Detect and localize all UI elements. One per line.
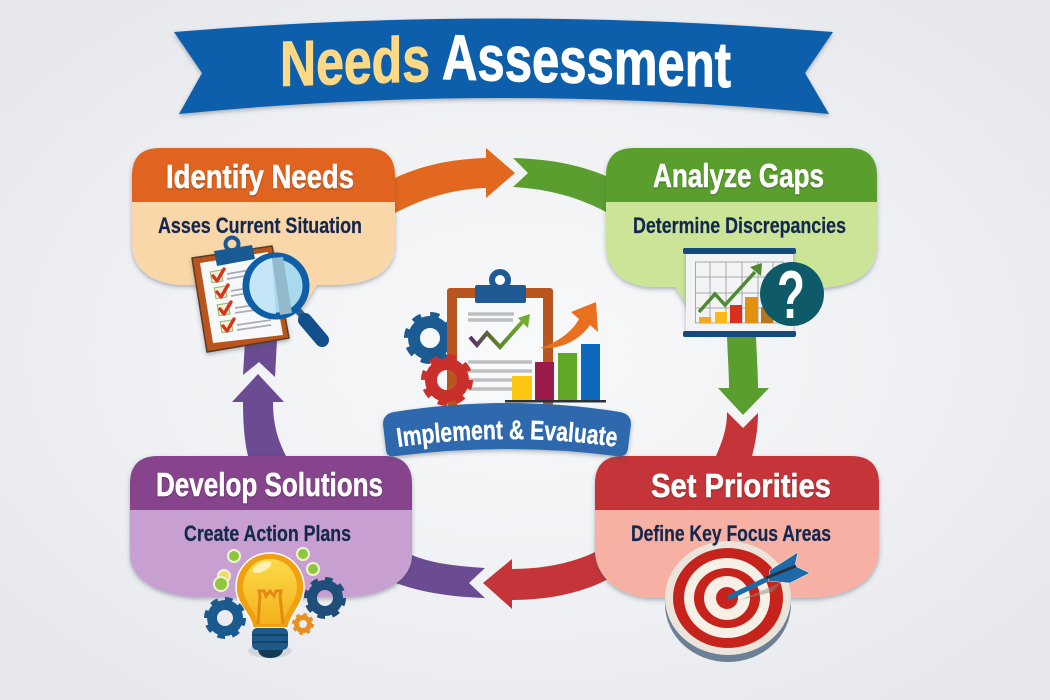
arrow: identify to analyze (395, 148, 515, 213)
blue gear (407, 315, 453, 361)
heading: Set Priorities (651, 467, 831, 504)
arrow: into identify needs (243, 340, 277, 377)
center icon: implement and evaluate (380, 269, 634, 461)
subheading: Determine Discrepancies (633, 213, 846, 238)
arrow: into analyze gaps (513, 158, 606, 212)
icon: left gear (206, 600, 244, 636)
arrow: solutions upward (232, 374, 286, 456)
arrow: into develop solutions (393, 555, 485, 598)
title word: Assessment: Assessment (442, 21, 731, 101)
icon: target with dart (665, 541, 810, 662)
icon: clipboard and magnifier (192, 238, 322, 352)
panel: identify needs (132, 148, 395, 352)
heading: Analyze Gaps (653, 157, 824, 194)
subheading: Create Action Plans (184, 521, 351, 546)
subheading: Define Key Focus Areas (631, 521, 831, 546)
panel: analyze gaps (606, 148, 877, 337)
heading: Identify Needs (166, 158, 354, 195)
ribbon label: Implement & Evaluate (396, 420, 617, 450)
icon: presentation chart with question mark (683, 248, 824, 337)
icon: small gear (294, 614, 312, 634)
title banner (174, 18, 833, 114)
arrow: priorities to solutions (483, 552, 610, 609)
subheading: Asses Current Situation (158, 213, 362, 238)
title word: Needs: Needs (280, 23, 430, 100)
bar chart (505, 344, 606, 402)
clipboard (447, 272, 553, 406)
icon: right gear (306, 580, 344, 616)
panel: develop solutions (130, 456, 412, 658)
orange growth arrow (540, 302, 598, 348)
arrow: analyze to priorities (718, 337, 769, 415)
icon: presentation chart with question mark: ? (777, 257, 805, 333)
ribbon label (380, 402, 634, 461)
red gear (424, 357, 470, 403)
panel: set priorities (595, 456, 879, 662)
heading: Develop Solutions (156, 466, 383, 503)
icon: light bulb and gears (206, 548, 344, 658)
arrow: into set priorities (716, 412, 758, 456)
